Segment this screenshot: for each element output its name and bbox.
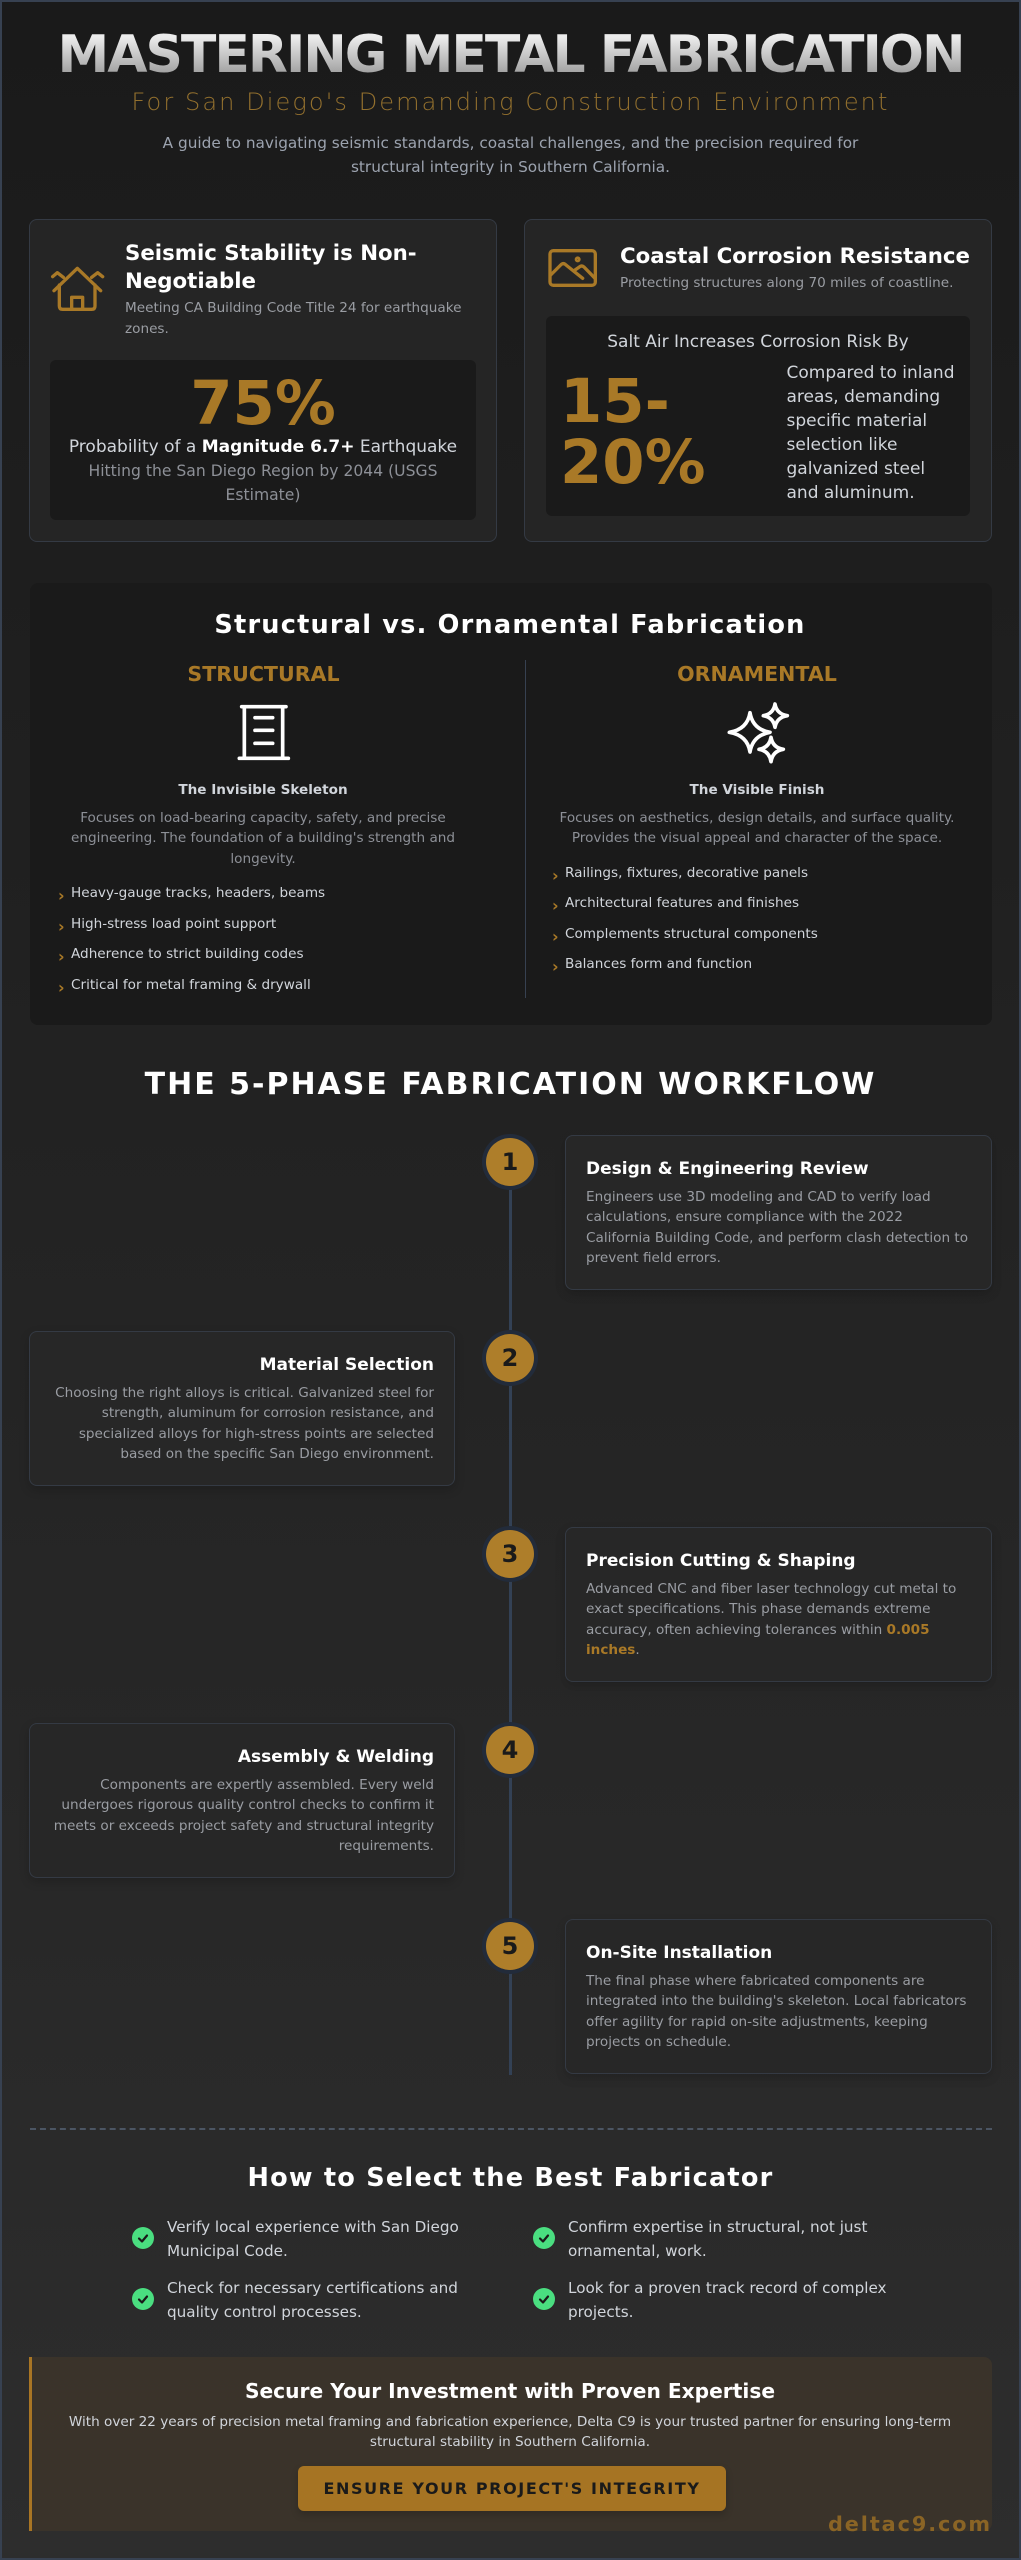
check item 3: Check for necessary certifications and xyxy=(167,2279,458,2297)
title: MASTERING METAL FABRICATION xyxy=(57,25,964,85)
sub heading: The Visible Finish xyxy=(690,782,824,798)
step card 2: specialized alloys for high-stress points are selected xyxy=(79,1426,434,1442)
stat caption: Salt Air Increases Corrosion Risk By xyxy=(607,332,909,352)
button xyxy=(298,2466,726,2511)
check item 3: quality control processes. xyxy=(167,2303,362,2321)
stat number: 75% xyxy=(190,369,336,439)
heading: Structural vs. Ornamental Fabrication xyxy=(214,610,806,640)
list xyxy=(58,885,325,997)
icon: photo xyxy=(548,249,597,287)
stat note: Hitting the San Diego Region by 2044 (USGS xyxy=(88,462,437,480)
panel: structural vs ornamental xyxy=(30,583,992,1025)
step card 1 xyxy=(565,1135,992,1290)
website watermark: deltac9.com xyxy=(828,2512,992,2536)
list: › xyxy=(58,917,65,936)
stat explanation: specific material xyxy=(786,411,927,431)
workflow heading: THE 5-PHASE FABRICATION WORKFLOW xyxy=(145,1067,876,1102)
timeline line xyxy=(508,1186,512,2075)
step card 4: meets or exceeds project safety and structural integrity xyxy=(54,1818,434,1834)
list: › xyxy=(58,886,65,905)
step card 3: accuracy, often achieving tolerances within 0.005 xyxy=(586,1622,930,1638)
check item 2: ornamental, work. xyxy=(568,2242,707,2260)
column title: STRUCTURAL xyxy=(187,662,340,686)
list: Heavy-gauge tracks, headers, beams xyxy=(71,885,325,901)
divider xyxy=(525,660,526,998)
check item 1: Verify local experience with San Diego xyxy=(167,2218,459,2236)
step number 5 xyxy=(486,1922,534,1970)
list: › xyxy=(552,927,559,946)
stat panel: 15-20% xyxy=(546,316,970,516)
call to action panel xyxy=(29,2357,992,2531)
step number 1 xyxy=(486,1138,534,1186)
step card 5: offer agility for rapid on-site adjustments, keeping xyxy=(586,2014,928,2030)
step card 1: Engineers use 3D modeling and CAD to verify load xyxy=(586,1189,931,1205)
description: engineering. The foundation of a building's strength and xyxy=(71,830,455,846)
check item 4: projects. xyxy=(568,2303,633,2321)
panel: seismic stability xyxy=(29,219,497,542)
accent bar xyxy=(29,2357,32,2531)
step card 2: based on the specific San Diego environment. xyxy=(120,1446,434,1462)
step card 4: Assembly & Welding xyxy=(238,1747,434,1767)
stat number: 15- xyxy=(560,367,670,437)
step card 2: Material Selection xyxy=(260,1355,434,1375)
step card 1: Design & Engineering Review xyxy=(586,1159,869,1179)
icon: sparkles xyxy=(728,702,790,764)
list: Balances form and function xyxy=(565,956,752,972)
column: structural xyxy=(58,662,455,997)
check item 2 xyxy=(533,2218,868,2260)
icon: house xyxy=(50,266,104,311)
step card 4: requirements. xyxy=(339,1838,434,1854)
step card 3: Precision Cutting & Shaping xyxy=(586,1551,856,1571)
step card 1: prevent field errors. xyxy=(586,1250,721,1266)
step number 4: 4 xyxy=(502,1736,518,1764)
stat note: Estimate) xyxy=(226,486,300,504)
intro text: structural integrity in Southern California. xyxy=(351,158,670,176)
step card 5: On-Site Installation xyxy=(586,1943,772,1963)
description: Focuses on load-bearing capacity, safety, and precise xyxy=(80,810,446,826)
check item 2: Confirm expertise in structural, not just xyxy=(568,2218,867,2236)
step number 4 xyxy=(486,1726,534,1774)
heading: Negotiable xyxy=(125,268,256,294)
list: › xyxy=(552,957,559,976)
list: › xyxy=(58,978,65,997)
step number 1: 1 xyxy=(502,1148,518,1176)
intro text: A guide to navigating seismic standards, coastal challenges, and the precision required for xyxy=(163,134,858,152)
list: › xyxy=(552,866,559,884)
subheading: zones. xyxy=(125,321,169,337)
step number 3: 3 xyxy=(502,1540,518,1568)
column title: ORNAMENTAL xyxy=(677,662,837,686)
heading: Seismic Stability is Non- xyxy=(125,241,417,266)
step card 5: integrated into the building's skeleton. Local fabricators xyxy=(586,1993,967,2009)
description: Focuses on aesthetics, design details, and surface quality. xyxy=(560,810,954,826)
stat explanation: galvanized steel xyxy=(786,459,925,479)
body text: With over 22 years of precision metal framing and fabrication experience, Delta C9 is your trusted partner for ensuring long-term xyxy=(69,2414,951,2430)
list: Railings, fixtures, decorative panels xyxy=(565,864,808,880)
step number 2 xyxy=(486,1334,534,1382)
section: selection checklist xyxy=(132,2163,887,2321)
check item 3 xyxy=(132,2279,458,2321)
step card 1: calculations, ensure compliance with the 2022 xyxy=(586,1209,903,1225)
stat number xyxy=(560,367,706,498)
stat number: 20% xyxy=(560,428,706,498)
step card 4 xyxy=(29,1723,455,1878)
check item 1: Municipal Code. xyxy=(167,2242,288,2260)
heading: How to Select the Best Fabricator xyxy=(248,2163,773,2193)
panel: coastal corrosion xyxy=(524,219,992,542)
step card 5: The final phase where fabricated components are xyxy=(586,1973,924,1989)
step card 3 xyxy=(565,1527,992,1682)
list: Complements structural components xyxy=(565,926,818,942)
list: Adherence to strict building codes xyxy=(71,946,304,962)
stat note xyxy=(88,462,437,504)
list: › xyxy=(552,896,559,915)
heading xyxy=(125,241,417,294)
column: ornamental xyxy=(552,662,954,976)
stat label: Probability of a Magnitude 6.7+ Earthquake xyxy=(69,437,457,457)
stat explanation: Compared to inland xyxy=(786,363,954,383)
step card 3: inches. xyxy=(586,1642,640,1658)
step card 3: exact specifications. This phase demands extreme xyxy=(586,1601,930,1617)
stat panel: 75% xyxy=(50,360,476,520)
body text xyxy=(69,2414,951,2450)
description: longevity. xyxy=(230,851,296,867)
step card 4: Components are expertly assembled. Every weld xyxy=(100,1777,434,1793)
intro text xyxy=(162,134,858,176)
step number 2: 2 xyxy=(502,1344,518,1372)
step card 4: undergoes rigorous quality control checks to confirm it xyxy=(61,1797,434,1813)
subheading: Meeting CA Building Code Title 24 for earthquake xyxy=(125,300,461,316)
stat explanation xyxy=(786,363,954,503)
heading: Coastal Corrosion Resistance xyxy=(620,244,970,268)
step card 2: strength, aluminum for corrosion resistance, and xyxy=(102,1405,434,1421)
stat explanation: areas, demanding xyxy=(786,387,940,407)
body text: structural stability in Southern California. xyxy=(370,2434,650,2450)
subtitle: For San Diego's Demanding Construction Environment xyxy=(131,88,890,116)
icon: building column xyxy=(238,704,290,760)
list: High-stress load point support xyxy=(71,916,276,932)
step number 3 xyxy=(486,1530,534,1578)
button: ENSURE YOUR PROJECT'S INTEGRITY xyxy=(323,2479,701,2498)
stat explanation: selection like xyxy=(786,435,897,455)
check item 4 xyxy=(533,2279,887,2321)
stat explanation: and aluminum. xyxy=(786,483,915,503)
description xyxy=(71,810,455,867)
description: Provides the visual appeal and character of the space. xyxy=(572,830,942,846)
sub heading: The Invisible Skeleton xyxy=(178,782,348,798)
step card 5: projects on schedule. xyxy=(586,2034,731,2050)
step card 1: California Building Code, and perform clash detection to xyxy=(586,1230,968,1246)
step card 2 xyxy=(29,1331,455,1486)
header xyxy=(57,25,964,176)
list: › xyxy=(58,947,65,966)
heading: Secure Your Investment with Proven Expertise xyxy=(245,2379,775,2403)
step number 5: 5 xyxy=(502,1932,518,1960)
step card 2: Choosing the right alloys is critical. Galvanized steel for xyxy=(55,1385,434,1401)
check item 4: Look for a proven track record of complex xyxy=(568,2279,887,2297)
step card 5 xyxy=(565,1919,992,2074)
description xyxy=(560,810,954,846)
list: Architectural features and finishes xyxy=(565,895,799,911)
list: Critical for metal framing & drywall xyxy=(71,977,311,993)
subheading xyxy=(125,300,461,337)
step card 3: Advanced CNC and fiber laser technology cut metal to xyxy=(586,1581,956,1597)
list xyxy=(552,864,818,976)
check item 1 xyxy=(132,2218,459,2260)
subheading: Protecting structures along 70 miles of coastline. xyxy=(620,274,953,290)
